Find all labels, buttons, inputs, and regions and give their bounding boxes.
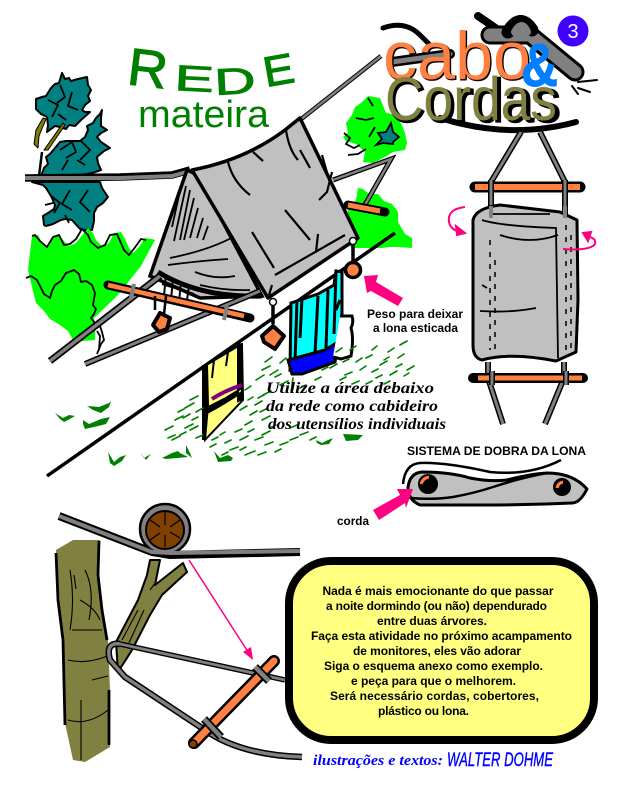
rope: horizontal tent line [25, 170, 190, 178]
diagram: tree trunk with branch [56, 540, 187, 762]
handwritten note: dos utensílios individuais [268, 416, 446, 433]
logo: cabo & Cordas: cabo [383, 18, 531, 94]
grass tufts [55, 401, 363, 466]
logo: cabo & Cordas: cabo [384, 19, 532, 95]
panel: yellow text box [289, 561, 594, 740]
rope: long front line [47, 233, 395, 476]
tree foliage: teal tree on the left [32, 73, 110, 230]
weight: left [153, 296, 170, 332]
title: REDE mateira [125, 37, 298, 136]
bush: bright green left [26, 228, 155, 354]
credit line [313, 750, 553, 771]
logo: cabo & Cordas: & [521, 32, 558, 99]
tent shade lines [168, 182, 250, 290]
hammock rope hatching [162, 274, 194, 302]
bush: bright green right upper [343, 96, 407, 163]
title: REDE mateira: D [213, 61, 257, 103]
weight: center [262, 298, 284, 349]
arrow: curved pink right [563, 232, 595, 249]
body text: Siga o esquema anexo como exemplo. [324, 659, 543, 673]
label: peso: Peso para deixar [367, 309, 464, 321]
diagram: rope around log [59, 504, 300, 555]
handwritten note [266, 380, 446, 433]
tarp [473, 205, 578, 361]
upper stick [475, 182, 580, 192]
body text: Nada é mais emocionante do que passar [322, 584, 554, 598]
arrow: pink to rope [373, 489, 413, 520]
title: REDE mateira: mateira [138, 94, 270, 136]
rope loops [491, 180, 566, 385]
lower ropes [488, 362, 564, 424]
logo: cabo & Cordas [383, 18, 561, 135]
body text [311, 584, 572, 718]
rope: upper right tent line [300, 56, 381, 120]
logo: cabo & Cordas: Cordas [387, 67, 561, 135]
diagram: tarp fold cross-section [403, 460, 587, 505]
rope stubs over tarp [491, 206, 565, 218]
handwritten note: Utilize a área debaixo [266, 380, 434, 397]
body text: Faça esta atividade no próximo acampamento [311, 629, 572, 643]
rope: around tree and through stick [109, 644, 302, 757]
body text: de monitores, eles vão adorar [353, 644, 521, 658]
rope: right side with stick [333, 159, 391, 212]
rope: left and lower tent ropes [50, 276, 260, 364]
bush: bright green right lower [346, 188, 412, 248]
hammock underside [158, 272, 262, 296]
stick: orange bottom [189, 661, 274, 748]
arrow: thin pink to the stick [189, 560, 253, 660]
title: REDE mateira: E [260, 45, 298, 96]
bush outline detail [344, 98, 375, 155]
tent: side end [150, 170, 262, 298]
label: peso [367, 309, 464, 335]
grass marks [165, 341, 414, 455]
page number badge: 3 [567, 21, 579, 43]
arrow: pink pointing to weight [364, 275, 403, 306]
tent: roof [192, 118, 358, 298]
small teal leaf [376, 123, 399, 145]
label: peso: a lona esticada [373, 323, 459, 335]
body text: entre duas árvores. [377, 614, 487, 628]
panel: folded tarp hanging between two sticks [473, 132, 583, 424]
label: corda: corda [337, 514, 369, 528]
body text: plástico ou lona. [378, 704, 469, 718]
lower stick [473, 373, 583, 383]
body text: e peça para que o melhorem. [351, 674, 516, 688]
title: REDE mateira: R [125, 37, 171, 100]
upper ropes [491, 132, 565, 218]
weight: right [346, 238, 360, 278]
rope: scribble behind logo [383, 16, 597, 130]
body text: Será necessário cordas, cobertores, [330, 689, 539, 703]
arrow: curved pink left [449, 207, 465, 235]
handwritten note: da rede como cabideiro [266, 398, 438, 415]
towel: cyan hanging cloth [288, 271, 353, 374]
title: REDE mateira: E [174, 58, 215, 100]
credit line: ilustrações e textos: [313, 753, 443, 769]
credit line: WALTER DOHME [447, 750, 553, 771]
logo: cabo & Cordas: Cordas [385, 65, 557, 133]
towel: yellow hanging cloth [202, 344, 243, 440]
stick: orange hammock spreader [108, 284, 250, 320]
body text: a noite dormindo (ou não) dependurado [326, 599, 547, 613]
label: sistema de dobra da lona: SISTEMA DE DOBRA DA LONA [407, 444, 586, 458]
page number badge [558, 16, 588, 46]
